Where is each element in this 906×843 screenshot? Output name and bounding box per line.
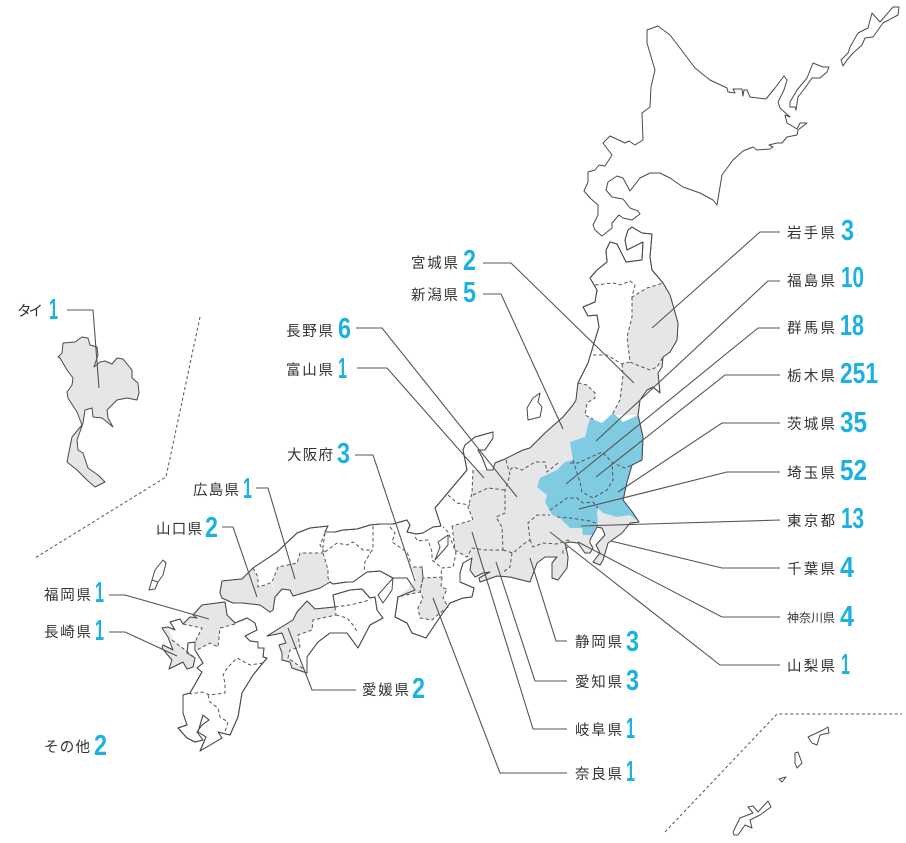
label: 富山県 1	[286, 353, 347, 385]
label: その他 2: その他	[44, 739, 90, 756]
label: 岩手県 3: 3	[841, 215, 854, 247]
label: 栃木県 251: 251	[840, 358, 878, 390]
label: 愛知県 3	[575, 665, 639, 697]
inset divider: thailand	[35, 317, 200, 558]
label: 長野県 6	[286, 313, 351, 345]
label: 山口県 2	[156, 512, 218, 544]
label: 奈良県 1: 1	[626, 756, 635, 788]
map: awaji island	[378, 578, 393, 603]
label: 岐阜県 1	[575, 713, 635, 745]
label: 大阪府 3	[287, 438, 350, 470]
label: 栃木県 251	[787, 358, 878, 390]
region: yamaguchi	[220, 568, 275, 612]
region: iwate	[627, 283, 678, 370]
label: 東京都 13	[787, 503, 864, 535]
region: chubu and chiba	[452, 383, 639, 582]
inset divider: okinawa	[665, 714, 902, 832]
map: honshu	[220, 227, 678, 638]
label: 愛媛県 2: 2	[412, 673, 425, 705]
label: タイ 1	[17, 294, 58, 326]
label: 千葉県 4: 千葉県	[787, 561, 835, 578]
label: 長野県 6: 長野県	[286, 323, 333, 340]
map: kyushu	[162, 602, 267, 751]
label: 奈良県 1: 奈良県	[575, 766, 622, 783]
label: 山口県 2: 2	[205, 512, 218, 544]
label: 福岡県 1: 福岡県	[44, 587, 91, 604]
label: 静岡県 3	[575, 626, 639, 658]
leader lines	[67, 232, 780, 773]
label: 埼玉県 52: 埼玉県	[787, 465, 835, 482]
map: okinawa islands	[733, 727, 829, 835]
label: 岩手県 3: 岩手県	[787, 225, 835, 242]
label: 大阪府 3: 大阪府	[287, 447, 333, 464]
label: 広島県 1: 1	[243, 473, 252, 505]
label: 静岡県 3: 3	[626, 626, 639, 658]
label: 福島県 10	[787, 262, 864, 294]
label: 大阪府 3: 3	[337, 438, 350, 470]
label: 山口県 2: 山口県	[156, 521, 202, 538]
label: 群馬県 18	[787, 310, 864, 342]
label: 福岡県 1: 1	[95, 577, 104, 609]
label: 岐阜県 1: 岐阜県	[575, 722, 622, 739]
map: sado island	[527, 393, 542, 420]
label: 神奈川県 4	[787, 601, 854, 633]
label: 奈良県 1	[575, 756, 635, 788]
label: 長崎県 1: 1	[95, 615, 104, 647]
prefecture boundaries	[172, 281, 663, 732]
label: 群馬県 18: 18	[840, 310, 864, 342]
label: 栃木県 251: 栃木県	[787, 368, 835, 385]
label: 長崎県 1	[44, 615, 104, 647]
map: shikoku	[267, 589, 383, 673]
label: 福島県 10: 10	[841, 262, 864, 294]
label: 山梨県 1	[787, 649, 850, 681]
label: 茨城県 35: 茨城県	[787, 416, 835, 433]
label: 宮城県 2: 2	[463, 245, 476, 277]
map: hokkaido and northern islands	[584, 7, 899, 236]
label: 茨城県 35: 35	[840, 407, 867, 439]
label: 長野県 6: 6	[338, 313, 351, 345]
label: その他 2: 2	[94, 730, 107, 762]
label: 愛知県 3: 愛知県	[575, 674, 622, 691]
label: 福岡県 1	[44, 577, 104, 609]
region: ehime	[267, 601, 336, 673]
coastlines over regions	[152, 227, 678, 751]
region: osaka	[397, 567, 423, 597]
label: 宮城県 2: 宮城県	[411, 255, 458, 272]
label: 愛媛県 2: 愛媛県	[362, 682, 409, 699]
label: 群馬県 18: 群馬県	[787, 320, 835, 337]
label: 宮城県 2	[411, 245, 476, 277]
label: 静岡県 3: 静岡県	[575, 634, 622, 651]
label: 愛媛県 2	[362, 673, 425, 705]
label: 茨城県 35	[787, 407, 867, 439]
label: 新潟県 5: 5	[463, 277, 476, 309]
label: 富山県 1: 富山県	[286, 362, 333, 379]
label: 埼玉県 52: 52	[840, 455, 867, 487]
label: 広島県 1	[193, 473, 252, 505]
label: 東京都 13: 13	[841, 503, 864, 535]
region: nara	[418, 577, 448, 620]
label: その他 2	[44, 730, 107, 762]
label: 山梨県 1: 山梨県	[787, 658, 835, 675]
label: 山梨県 1: 1	[841, 649, 850, 681]
label: 千葉県 4	[787, 552, 854, 584]
label: 広島県 1: 広島県	[193, 482, 239, 499]
label: 富山県 1: 1	[338, 353, 347, 385]
region: nagasaki	[162, 627, 195, 669]
label: 埼玉県 52	[787, 455, 867, 487]
region: hiroshima	[273, 553, 331, 597]
label: 新潟県 5	[411, 277, 476, 309]
label: 東京都 13: 東京都	[787, 513, 835, 530]
label: タイ 1: 1	[49, 294, 58, 326]
label: 千葉県 4: 4	[840, 552, 854, 584]
label: 新潟県 5: 新潟県	[411, 287, 458, 304]
label: 神奈川県 4: 神奈川県	[787, 610, 835, 625]
label: 岩手県 3	[787, 215, 854, 247]
label: 福島県 10: 福島県	[787, 273, 835, 290]
map: tsushima	[149, 560, 166, 590]
label: タイ 1: タイ	[17, 303, 43, 320]
label: 愛知県 3: 3	[626, 665, 639, 697]
map: thailand	[58, 337, 139, 487]
label: 岐阜県 1: 1	[626, 713, 635, 745]
region: fukuoka	[183, 602, 235, 650]
label: 長崎県 1: 長崎県	[44, 624, 91, 641]
label: 神奈川県 4: 4	[840, 601, 854, 633]
region: miyagi	[612, 362, 660, 415]
region: kanto highlighted	[537, 413, 643, 535]
